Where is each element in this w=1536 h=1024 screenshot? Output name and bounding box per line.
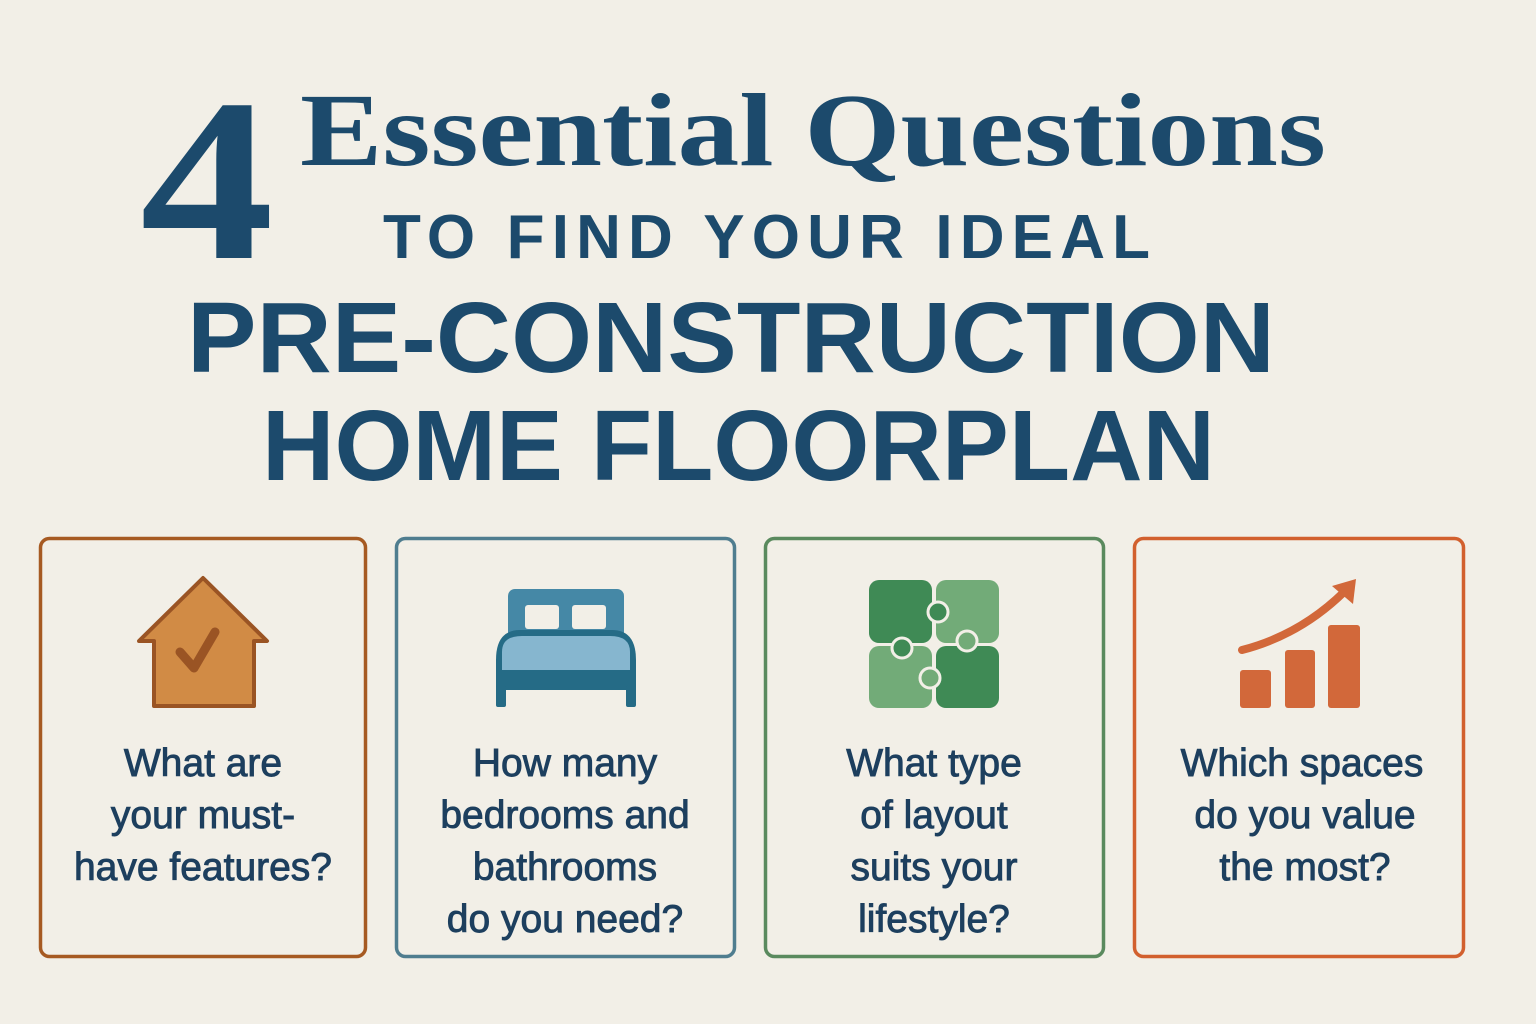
text: question 1: your must- — [111, 794, 295, 837]
icon: bar chart with arrow — [1240, 579, 1360, 708]
panel: layout — [766, 538, 1104, 956]
panel: must-have features — [40, 538, 366, 956]
title: PRE-CONSTRUCTION — [187, 282, 1275, 394]
text: question 3: suits your — [851, 846, 1017, 889]
text: question 4: Which spaces — [1181, 742, 1423, 785]
text: question 1: What are — [124, 742, 282, 785]
title: Essential Questions — [300, 73, 1326, 188]
text: question 3: What type — [846, 742, 1022, 785]
text: question 2: bedrooms and — [440, 794, 690, 837]
text: question 4: do you value — [1194, 794, 1416, 837]
text: question 1: have features? — [74, 846, 332, 889]
text: question 2: do you need? — [447, 898, 683, 941]
text: question 2: bathrooms — [473, 846, 657, 889]
text: question 3: of layout — [860, 794, 1008, 837]
text: question 3 — [846, 742, 1022, 941]
icon: bed — [496, 589, 636, 707]
text: question 4 — [1181, 742, 1423, 889]
text: question 4: the most? — [1219, 846, 1391, 889]
panel: spaces valued — [1134, 538, 1464, 956]
text: question 1 — [74, 742, 332, 889]
panel: bedrooms — [396, 538, 734, 956]
icon: house with check — [139, 578, 267, 706]
title: 4 — [140, 52, 274, 309]
title — [140, 52, 1326, 502]
icon: puzzle — [867, 578, 1001, 710]
text: question 3: lifestyle? — [858, 898, 1010, 941]
title: HOME FLOORPLAN — [262, 390, 1215, 502]
text: question 2: How many — [473, 742, 658, 785]
text: question 2 — [440, 742, 690, 941]
title: TO FIND YOUR IDEAL — [383, 203, 1150, 272]
